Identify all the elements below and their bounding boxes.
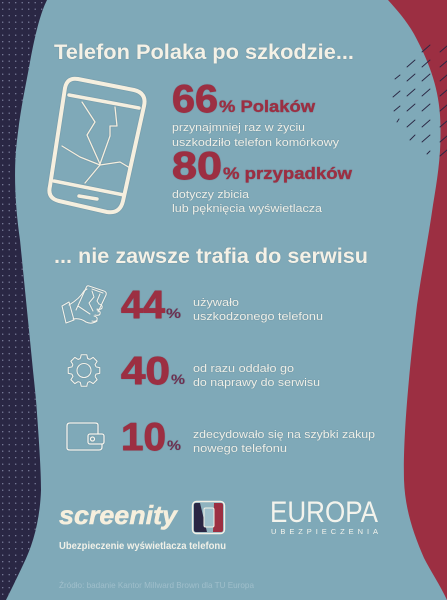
- panel: red right band: [388, 0, 447, 600]
- description: uszkodziło telefon komórkowy: [172, 137, 340, 149]
- number 40: 40: [121, 350, 170, 393]
- description: lub pęknięcia wyświetlacza: [172, 203, 323, 215]
- description: używało: [193, 297, 239, 309]
- title: Telefon Polaka po szkodzie...: [54, 41, 354, 64]
- stat block: 80%: [172, 145, 353, 215]
- description: przynajmniej raz w życiu: [172, 122, 305, 134]
- label: % przypadków: % przypadków: [223, 164, 353, 183]
- number 44: 44: [121, 284, 165, 327]
- description: nowego telefonu: [193, 443, 287, 455]
- icon: hand holding broken phone: [62, 286, 106, 323]
- sub-wordmark: UBEZPIECZENIA: [271, 527, 378, 536]
- description: do naprawy do serwisu: [193, 377, 320, 389]
- icon: screenity app: [192, 502, 224, 534]
- percent sign: %: [171, 371, 186, 387]
- label: % Polaków: % Polaków: [219, 97, 316, 116]
- icon: gear: [68, 355, 100, 386]
- panel: navy dotted left band: [0, 0, 47, 600]
- percent sign: %: [166, 305, 182, 321]
- percent sign: %: [167, 437, 182, 453]
- number 66: 66: [172, 78, 218, 121]
- row: 40%: [68, 350, 320, 393]
- icon: cracked phone: [49, 79, 145, 212]
- tagline: Ubezpieczenie wyświetlacza telefonu: [59, 540, 226, 552]
- number 10: 10: [121, 416, 166, 459]
- row: 10%: [67, 416, 375, 459]
- stat block: 66%: [172, 78, 340, 149]
- description: od razu oddało go: [193, 363, 294, 375]
- icon: wallet: [67, 423, 104, 450]
- description: uszkodzonego telefonu: [193, 311, 323, 323]
- description: zdecydowało się na szybki zakup: [193, 429, 375, 441]
- logo: Europa Ubezpieczenia: [270, 496, 378, 536]
- decorative dash pattern: [393, 45, 447, 156]
- subtitle: ... nie zawsze trafia do serwisu: [54, 245, 368, 268]
- number 80: 80: [172, 145, 222, 188]
- row: 44%: [62, 284, 323, 327]
- logo: screenity: screenity: [59, 500, 179, 530]
- source note: Źródło: badanie Kantor Millward Brown dla TU Europa: [59, 580, 254, 590]
- wordmark: EUROPA: [270, 496, 378, 529]
- description: dotyczy zbicia: [172, 189, 250, 201]
